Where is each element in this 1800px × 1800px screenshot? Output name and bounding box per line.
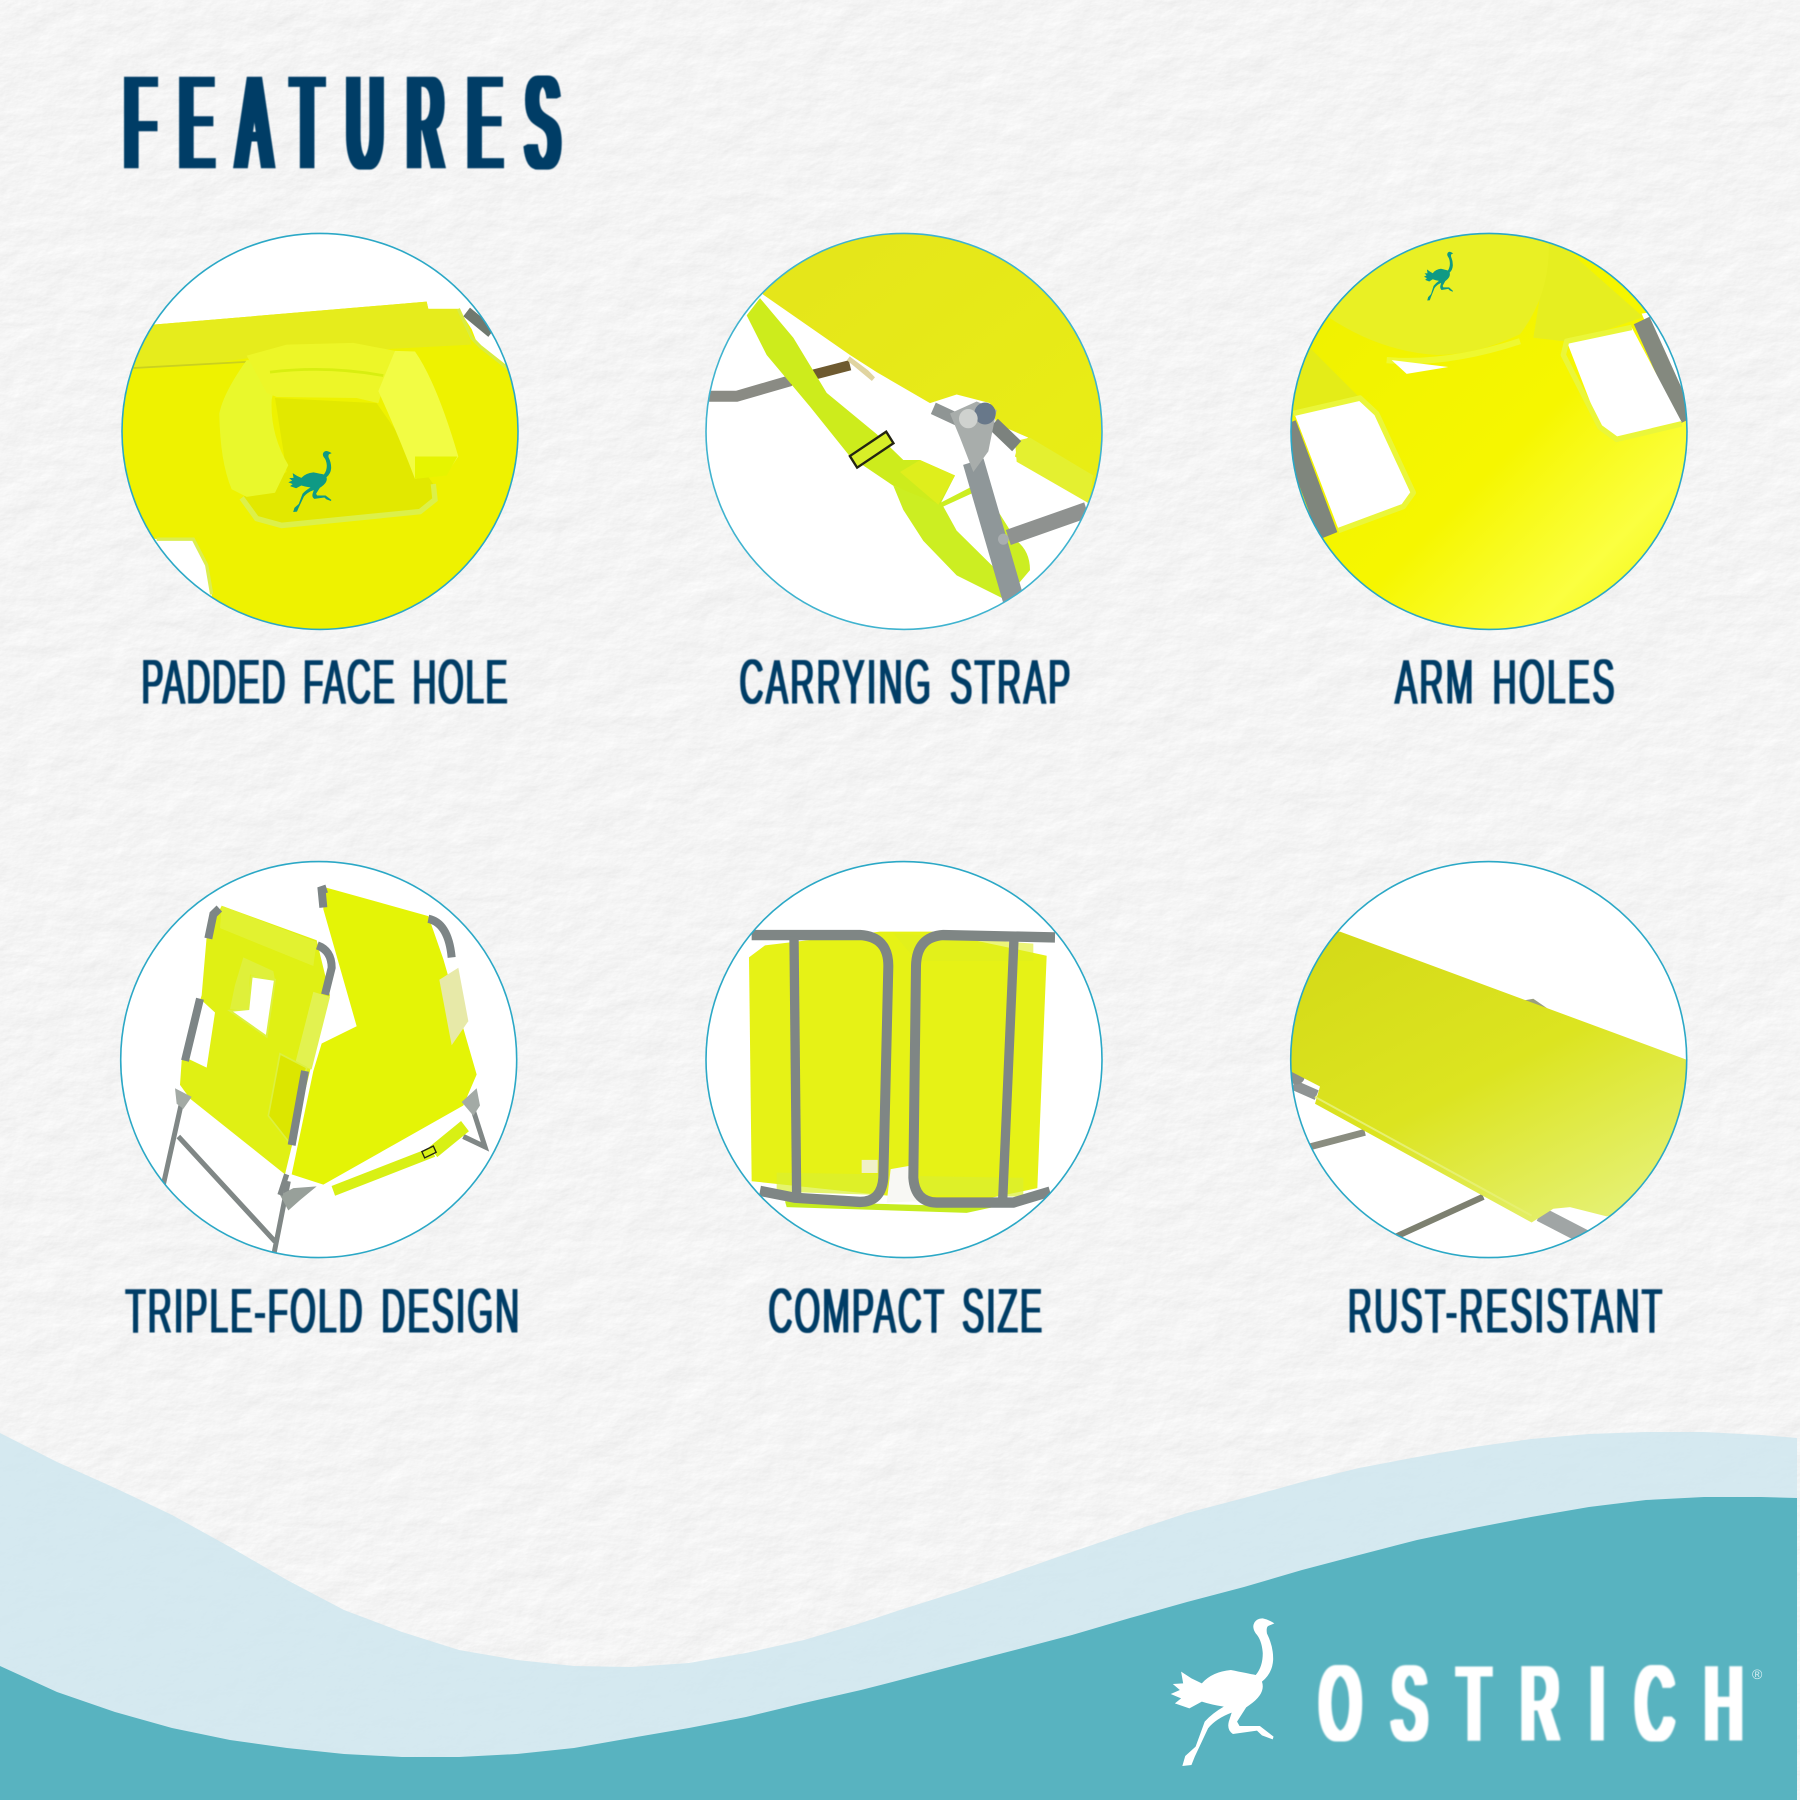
photo: arm holes <box>1292 234 1686 629</box>
logo: Ostrich <box>1171 1618 1763 1766</box>
padding <box>219 360 288 497</box>
back panel <box>292 887 477 1185</box>
dark wave <box>0 1497 1797 1800</box>
icon: ostrich <box>1171 1618 1274 1766</box>
luggage tag <box>439 968 468 1045</box>
holes <box>185 999 215 1068</box>
bottom strip <box>785 1201 993 1213</box>
circle outline <box>122 233 518 629</box>
arm hole right <box>1567 327 1682 439</box>
photo: carrying strap <box>706 214 1113 629</box>
tubes <box>1642 321 1687 420</box>
ostrich mark <box>288 451 332 512</box>
pillow <box>1328 214 1549 355</box>
panel: padded face hole <box>113 233 533 717</box>
legs <box>163 1102 485 1257</box>
label: PADDED FACE HOLE <box>142 646 508 717</box>
photo: compact size <box>706 862 1102 1258</box>
frame <box>1397 1197 1483 1236</box>
strap <box>893 482 1030 599</box>
buckle <box>850 432 893 468</box>
light wave <box>0 1432 1797 1800</box>
photo: triple-fold design <box>121 862 517 1258</box>
folded fabric <box>749 932 1047 1204</box>
arm hole left <box>1295 398 1413 529</box>
label: RUST-RESISTANT <box>1348 1275 1662 1347</box>
front panel <box>180 906 330 1174</box>
title: FEATURES <box>125 49 559 197</box>
circle outline <box>121 862 517 1258</box>
canvas <box>1283 932 1703 1223</box>
panel: arm holes <box>1290 232 1688 705</box>
circle outline <box>706 862 1102 1258</box>
label: ARM HOLES <box>1395 646 1614 717</box>
strap <box>333 1152 433 1191</box>
registered mark: ® <box>1752 1666 1763 1682</box>
wordmark: OSTRICH <box>1320 1645 1742 1762</box>
circle outline <box>1291 862 1687 1258</box>
photo: rust-resistant <box>1283 862 1703 1258</box>
hinges <box>175 1088 192 1109</box>
circle outline <box>1291 233 1687 629</box>
frame <box>752 935 888 1202</box>
face hole <box>242 398 435 525</box>
label: COMPACT SIZE <box>768 1275 1042 1347</box>
label: CARRYING STRAP <box>740 646 1070 717</box>
circle outline <box>706 233 1102 629</box>
panel: rust-resistant <box>1283 862 1703 1347</box>
label: TRIPLE-FOLD DESIGN <box>126 1275 519 1347</box>
tags <box>862 1160 878 1173</box>
frame and hinge <box>1008 510 1087 537</box>
panel: triple-fold design <box>121 862 519 1347</box>
frame <box>185 889 452 1145</box>
photo: padded face hole <box>122 234 518 629</box>
ostrich mark <box>1424 252 1453 301</box>
panel: compact size <box>706 862 1102 1347</box>
panel: carrying strap <box>706 214 1113 717</box>
